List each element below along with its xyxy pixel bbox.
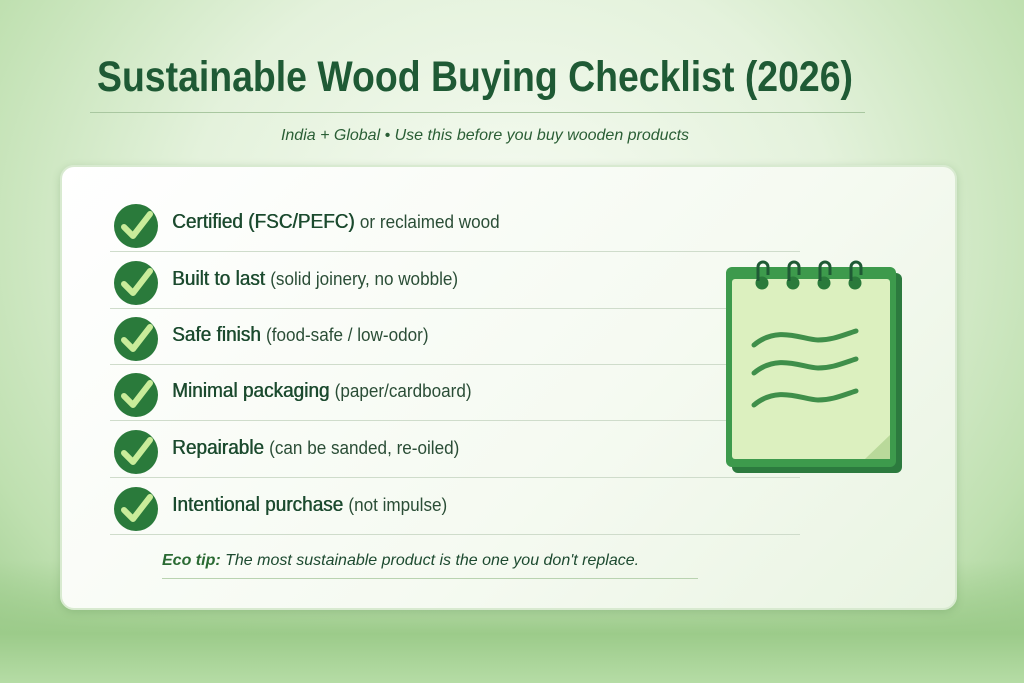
item 5: Repairable (can be sanded, re-oiled): [172, 437, 459, 459]
item 5: [110, 430, 800, 478]
item 2: Built to last (solid joinery, no wobble): [172, 268, 458, 290]
subtitle: India + Global • Use this before you buy wooden products: [281, 127, 689, 144]
item 1: Certified (FSC/PEFC) or reclaimed wood: [172, 211, 500, 233]
item 1: [110, 204, 800, 252]
item 6: Intentional purchase (not impulse): [172, 494, 447, 516]
eco tip: Eco tip: The most sustainable product is the one you don't replace.: [162, 552, 639, 569]
title: Sustainable Wood Buying Checklist (2026): [97, 53, 853, 101]
item 4: [110, 373, 726, 421]
item 6: [110, 487, 800, 535]
eco tip: [162, 552, 698, 579]
item 3: Safe finish (food-safe / low-odor): [172, 324, 429, 346]
panel: checklist: [60, 165, 957, 610]
icon: notepad: [726, 260, 902, 473]
item 3: [110, 317, 726, 365]
item 4: Minimal packaging (paper/cardboard): [172, 380, 472, 402]
bottom foliage: [0, 560, 1024, 683]
item 2: [110, 261, 726, 309]
